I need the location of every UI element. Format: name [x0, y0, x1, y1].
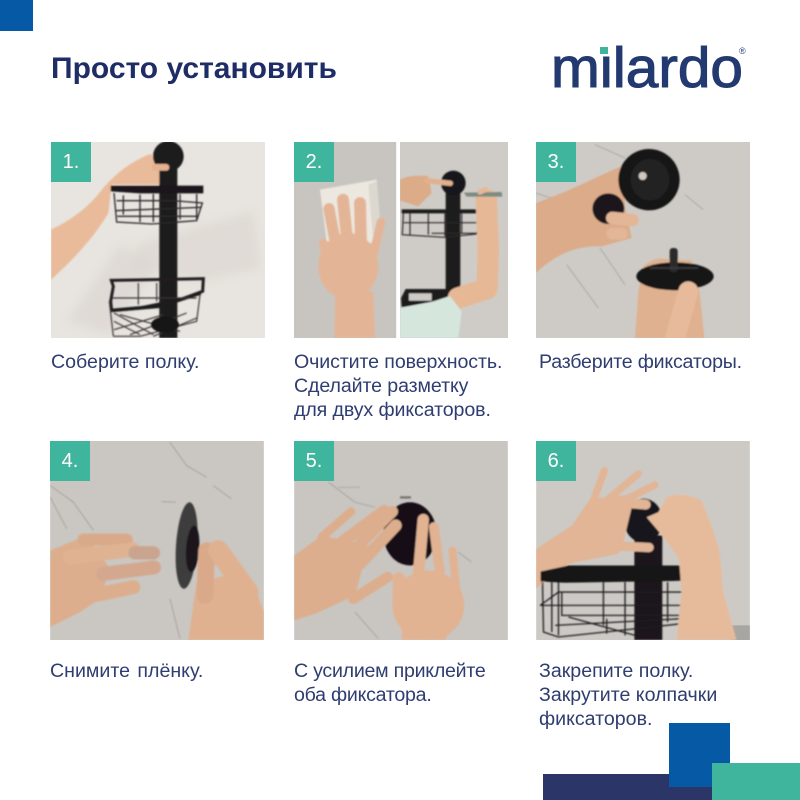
- caption 2: Очистите поверхность.: [294, 351, 502, 373]
- panel 5: glue the fixers: [294, 441, 508, 640]
- caption 6: Закрепите полку.: [539, 660, 693, 682]
- step number 6: [536, 441, 576, 481]
- logo: milardo: ®: [739, 46, 746, 56]
- decorative corner blocks: [543, 723, 800, 800]
- caption 3: Разберите фиксаторы.: [539, 351, 742, 373]
- photo 5: [294, 441, 508, 640]
- caption 5: [294, 660, 486, 706]
- panel 3: disassemble the fixers: [536, 142, 750, 338]
- step number 6: 6.: [548, 450, 564, 472]
- caption 2: Сделайте разметку: [294, 375, 468, 397]
- caption 4: Снимите плёнку.: [50, 660, 203, 682]
- step number 3: [536, 142, 576, 182]
- caption 6: фиксаторов.: [539, 708, 652, 730]
- caption 2: для двух фиксаторов.: [294, 399, 491, 421]
- photo 3: [536, 142, 750, 338]
- panel 4: remove the film: [50, 201, 676, 640]
- decorative top-left blue square: [0, 0, 33, 31]
- step number 1: 1.: [63, 151, 79, 173]
- caption 2: [294, 351, 502, 421]
- step number 4: 4.: [62, 450, 78, 472]
- caption 6: [539, 660, 717, 730]
- panel 1: assemble the shelf: [51, 142, 676, 624]
- step number 2: 2.: [306, 151, 322, 173]
- title: Просто установить: [51, 52, 337, 85]
- panel 6: mount the shelf: [536, 441, 750, 640]
- step number 4: [50, 441, 90, 481]
- step number 2: [294, 142, 334, 182]
- photo 2: [294, 142, 508, 338]
- step number 1: [51, 142, 91, 182]
- photo 4: [50, 201, 676, 640]
- panel 2: clean and mark: [294, 142, 508, 338]
- step number 3: 3.: [548, 151, 564, 173]
- caption 5: С усилием приклейте: [294, 660, 486, 682]
- photo 1: [51, 142, 265, 338]
- caption 5: оба фиксатора.: [294, 684, 432, 706]
- photo 6: [536, 441, 750, 640]
- step number 5: 5.: [306, 450, 322, 472]
- step number 5: [294, 441, 334, 481]
- caption 6: Закрутите колпачки: [539, 684, 717, 706]
- caption 1: Соберите полку.: [51, 351, 199, 373]
